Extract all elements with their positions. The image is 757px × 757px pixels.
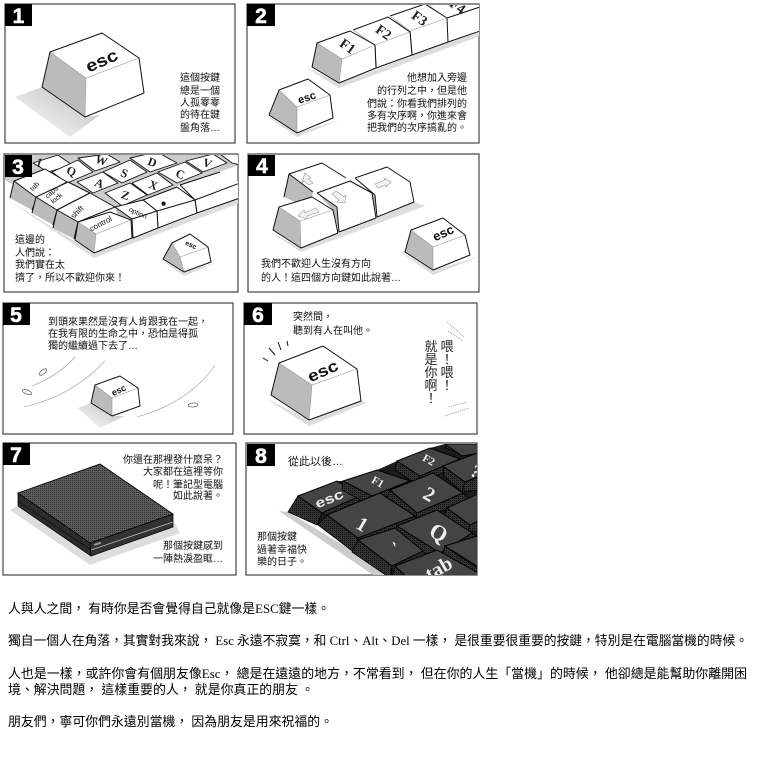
vertical shout: 喂 xyxy=(440,365,454,380)
panel 4: arrow keys xyxy=(248,154,479,292)
illustration: dark keyboard: ? xyxy=(467,461,485,483)
caption 2: 們說：你看我們排列的 xyxy=(367,97,467,110)
caption 1: 這個按鍵 xyxy=(180,71,220,84)
badge 7: 7 xyxy=(10,444,22,467)
caption 3 xyxy=(15,233,125,284)
vertical shout: 就 xyxy=(424,339,438,354)
illustration: keyboard: control xyxy=(88,214,114,233)
caption 1: 的待在鍵 xyxy=(180,108,220,121)
caption 7 top: 呢！筆記型電腦 xyxy=(153,478,223,491)
illustration: keyboard: tab xyxy=(29,181,41,193)
illustration: function key row: F3 xyxy=(408,9,430,30)
illustration: function key row: F1 xyxy=(336,37,358,58)
body text xyxy=(8,601,748,729)
illustration: dark keyboard: 2 xyxy=(419,483,439,507)
badge 1: 1 xyxy=(13,5,25,28)
illustration: keyboard: W xyxy=(93,152,109,169)
illustration: keyboard: ● xyxy=(158,198,169,210)
caption 5: 到頭來果然是沒有人肯跟我在一起， xyxy=(48,315,208,328)
illustration: keyboard: S xyxy=(119,166,130,181)
illustration: dark keyboard: 1 xyxy=(352,513,372,537)
icon: esc key with shadow xyxy=(15,33,144,137)
caption 2: 他想加入旁邊 xyxy=(407,71,467,84)
caption 6: 突然間， xyxy=(293,310,333,323)
illustration: keyboard: X xyxy=(147,177,160,193)
badge 6: 6 xyxy=(252,304,264,327)
caption 4: 我們不歡迎人生沒有方向 xyxy=(261,257,371,270)
illustration: dark keyboard: Q xyxy=(425,517,452,548)
caption 8 bottom: 那個按鍵 xyxy=(257,530,297,543)
badge 2: 2 xyxy=(255,5,267,28)
caption 7 bottom: 一陣熱淚盈眶… xyxy=(153,552,223,565)
vertical shout: 啊 xyxy=(424,378,438,393)
caption 7 bottom: 那個按鍵感到 xyxy=(163,539,223,552)
vertical shout: ！ xyxy=(424,391,438,406)
caption 2 xyxy=(367,71,467,134)
hatching lines xyxy=(445,322,469,416)
caption 5: 在我有限的生命之中，恐怕是得孤 xyxy=(48,327,198,340)
badge 5 xyxy=(3,303,30,327)
caption 2: 的行列之中，但是他 xyxy=(377,84,467,97)
illustration: dark keyboard: F1 xyxy=(369,474,386,491)
caption 5: 獨的繼續過下去了… xyxy=(48,339,138,352)
caption 4 xyxy=(261,257,401,284)
vertical shout: ！ xyxy=(440,378,454,393)
body text: 朋友們，寧可你們永遠別當機， 因為朋友是用來祝福的。 xyxy=(8,714,333,729)
caption 4: 的人！這四個方向鍵如此說著… xyxy=(261,271,401,284)
caption 1: 總是一個 xyxy=(180,84,220,97)
caption 8 bottom: 樂的日子。 xyxy=(257,555,307,568)
caption 3: 這邊的 xyxy=(15,233,45,246)
vertical shout: 喂 xyxy=(440,339,454,354)
icon: esc key xyxy=(400,218,478,275)
illustration: keyboard: shift xyxy=(69,203,86,221)
body text: 境、解決問題， 這樣重要的人， 就是你真正的朋友 。 xyxy=(8,682,314,697)
caption 1 xyxy=(180,71,220,134)
badge 8: 8 xyxy=(255,445,267,468)
caption 7 bottom xyxy=(153,539,223,565)
caption 7 top: 你還在那裡發什麼呆？ xyxy=(123,453,223,466)
caption 8 bottom: 過著幸福快 xyxy=(257,543,307,556)
caption 3: 擠了，所以不歡迎你來！ xyxy=(15,271,125,284)
body text: 人也是一樣，或許你會有個朋友像Esc， 總是在遠遠的地方，不常看到， 但在你的人生「當機」的時候， 他卻總是能幫助你離開困 xyxy=(8,666,747,681)
icon: esc key xyxy=(78,376,140,428)
icon: esc key: esc xyxy=(296,90,318,107)
caption 8 bottom xyxy=(257,530,307,568)
badge 1 xyxy=(5,4,32,28)
vertical shout: ！ xyxy=(440,352,454,367)
panel 3: full keyboard xyxy=(4,152,240,292)
illustration: arrow keys xyxy=(270,163,425,252)
illustration: keyboard: option xyxy=(128,206,148,221)
caption 2: 多有次序啊，你進來會 xyxy=(367,109,467,122)
icon: laptop xyxy=(10,464,180,565)
caption 8 top: 從此以後… xyxy=(288,454,343,468)
icon: esc key: esc xyxy=(430,222,456,244)
illustration: keyboard: A xyxy=(93,175,106,191)
illustration: keyboard: caps xyxy=(44,185,60,200)
illustration: keyboard: V xyxy=(201,155,214,171)
panel 8: dark keyboard xyxy=(245,442,478,576)
badge 6 xyxy=(244,303,272,327)
panel 2: function keys xyxy=(247,0,480,143)
caption 5 xyxy=(48,315,208,352)
illustration: dark keyboard xyxy=(279,444,477,575)
caption 3: 人們說： xyxy=(15,246,55,259)
panel 7: laptop xyxy=(3,443,236,575)
vertical shout: 你 xyxy=(424,365,438,380)
caption 7 top: 如此說著。 xyxy=(173,489,223,502)
icon: small esc key: esc xyxy=(184,240,197,251)
illustration: keyboard: C xyxy=(174,166,187,182)
illustration: dark keyboard: F2 xyxy=(420,452,437,469)
caption 1: 盤角落… xyxy=(180,121,220,134)
illustration: dark keyboard: esc xyxy=(313,487,346,512)
badge 4 xyxy=(248,155,275,178)
icon: esc key with alert strokes xyxy=(263,341,366,426)
panel 5: alone xyxy=(3,303,233,434)
caption 7 top xyxy=(123,453,223,502)
illustration: keyboard: Q xyxy=(65,163,78,179)
panel 1: lonely esc key xyxy=(5,4,235,143)
icon: esc key xyxy=(265,79,340,137)
caption 6: 聽到有人在叫他。 xyxy=(293,324,373,337)
caption 7 top: 大家都在這裡等你 xyxy=(143,465,223,478)
illustration: dark keyboard: tab xyxy=(421,552,457,585)
illustration: keyboard: 1 xyxy=(34,155,45,170)
badge 8 xyxy=(247,444,275,468)
illustration: wind lines and leaves xyxy=(22,357,215,417)
body text: 獨自一個人在角落，其實對我來說， Esc 永遠不寂寞，和 Ctrl、Alt、Del 一樣， 是很重要很重要的按鍵，特別是在電腦當機的時候。 xyxy=(8,633,748,648)
vertical shout xyxy=(424,339,454,406)
badge 5: 5 xyxy=(10,304,22,327)
badge 7 xyxy=(3,443,30,467)
panel 6: called xyxy=(244,303,477,434)
illustration: dark keyboard: ` xyxy=(383,539,399,561)
vertical shout: 是 xyxy=(424,352,438,367)
illustration: keyboard: Z xyxy=(119,187,132,203)
badge 4: 4 xyxy=(256,155,268,178)
badge 3 xyxy=(5,155,32,179)
illustration: function key row: F2 xyxy=(372,23,394,44)
icon: esc key: esc xyxy=(110,383,128,398)
badge 3: 3 xyxy=(12,156,24,179)
caption 3: 我們實在太 xyxy=(15,258,65,271)
illustration: keyboard: lock xyxy=(50,192,64,206)
icon: esc key with alert strokes: esc xyxy=(305,356,341,386)
caption 2: 把我們的次序搞亂的。 xyxy=(367,121,467,134)
caption 1: 人孤零零 xyxy=(180,97,220,109)
badge 2 xyxy=(247,4,275,28)
caption 6 xyxy=(293,310,373,337)
body text: 人與人之間， 有時你是否會覺得自己就像是ESC鍵一樣。 xyxy=(8,601,330,616)
icon: small esc key xyxy=(160,234,216,276)
illustration: keyboard xyxy=(5,152,240,258)
illustration: function key row xyxy=(305,0,480,88)
icon: esc key with shadow: esc xyxy=(82,45,121,76)
illustration: keyboard: D xyxy=(146,154,159,170)
